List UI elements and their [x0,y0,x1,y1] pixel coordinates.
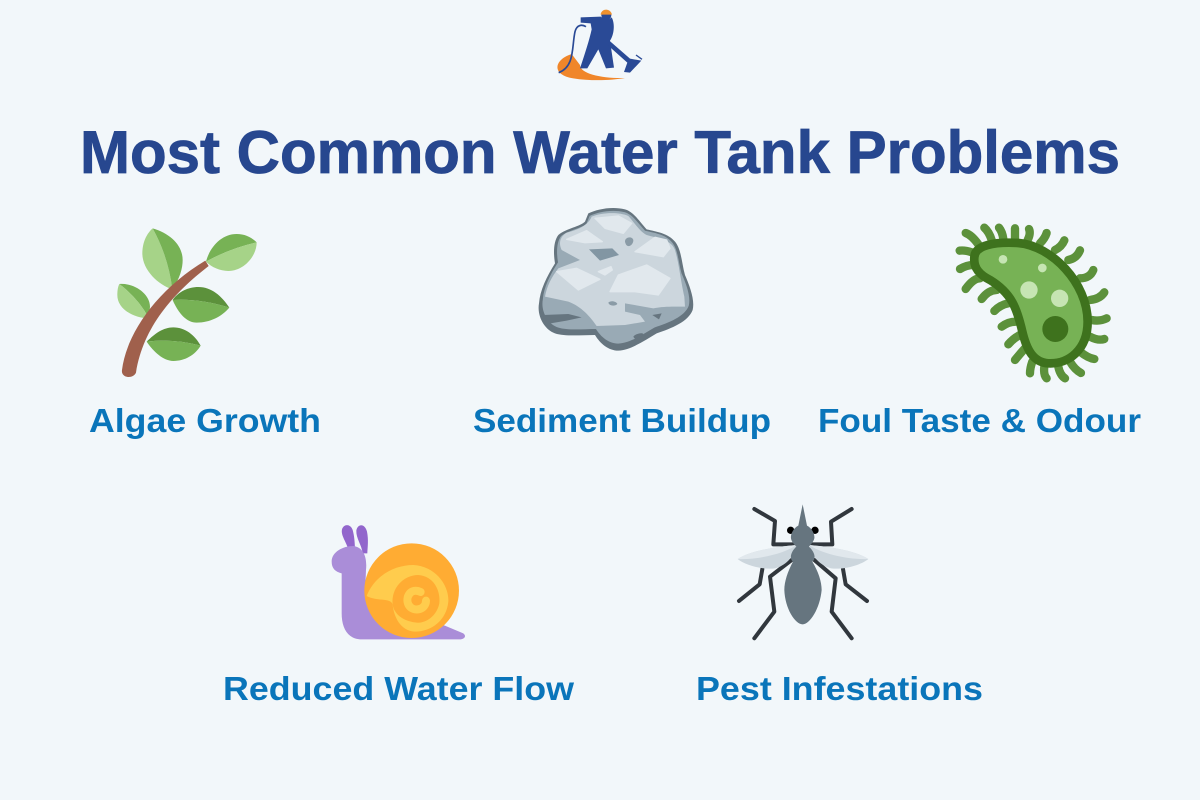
panel: sediment buildup [473,208,771,439]
label: pest infestations: Pest Infestations [696,670,983,707]
icon: leafy branch [117,228,257,377]
panel: reduced water flow [223,525,574,707]
panel: pest infestations [696,504,983,707]
icon: green bacterium [960,228,1107,378]
icon: snail [332,525,465,639]
title: Most Common Water Tank Problems [80,119,1120,186]
label: reduced water flow: Reduced Water Flow [223,670,574,707]
icon: company logo, worker cleaning with hose [557,10,642,80]
label: algae growth: Algae Growth [89,402,321,439]
icon: rock [539,208,693,351]
icon: mosquito [738,504,868,638]
panel: foul taste and odour [818,228,1141,439]
label: sediment buildup: Sediment Buildup [473,402,771,439]
panel: algae growth [89,228,321,439]
label: foul taste and odour: Foul Taste & Odour [818,402,1141,439]
